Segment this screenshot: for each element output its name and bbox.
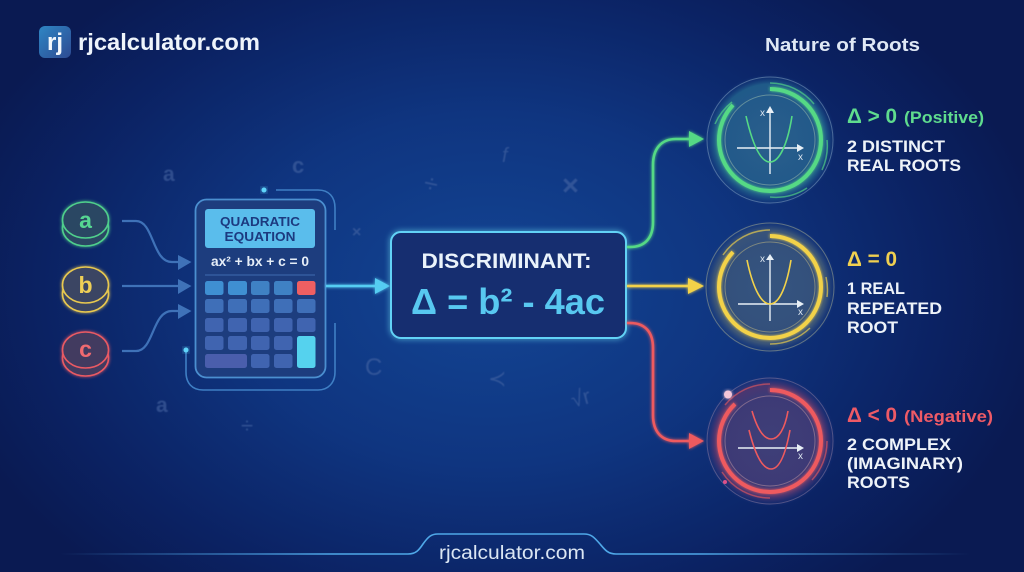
text block: zero: 1 REAL xyxy=(847,279,905,298)
text block: negative: Δ < 0 xyxy=(847,404,897,427)
calculator xyxy=(196,200,326,378)
footer url: rjcalculator.com xyxy=(439,543,585,564)
faded math symbols xyxy=(156,145,593,438)
text block: positive: 2 DISTINCT xyxy=(847,137,946,156)
icon: complex roots graph: x xyxy=(798,451,803,462)
input coin a: a xyxy=(79,207,92,233)
calculator keypad xyxy=(205,275,316,368)
faded math symbols: × xyxy=(352,224,361,241)
text block: positive: REAL ROOTS xyxy=(847,156,961,175)
faded math symbols: √r xyxy=(568,383,593,412)
faded math symbols: ÷ xyxy=(421,169,441,199)
input coin c xyxy=(62,332,108,376)
faded math symbols: ≺ xyxy=(488,366,506,391)
discriminant formula: Δ = b² - 4ac xyxy=(411,281,605,322)
screen title: EQUATION xyxy=(224,230,296,244)
arrow: calculator to discriminant xyxy=(326,278,390,294)
input coin c: c xyxy=(79,336,92,362)
text block: positive: Δ > 0 xyxy=(847,105,897,128)
panel: discriminant xyxy=(391,232,626,338)
faded math symbols: ÷ xyxy=(241,413,253,438)
faded math symbols: a xyxy=(163,163,175,186)
text block: negative: ROOTS xyxy=(847,473,910,492)
icon: positive roots graph: x xyxy=(798,152,803,163)
text block: positive xyxy=(847,105,984,175)
icon: complex roots graph xyxy=(704,375,836,507)
screen title: QUADRATIC xyxy=(220,215,300,229)
arrow: to positive xyxy=(627,131,704,247)
arrow: to zero xyxy=(627,278,704,294)
text block: zero: ROOT xyxy=(847,318,899,337)
input coin a xyxy=(62,202,108,246)
logo letters: rj xyxy=(47,29,63,56)
faded math symbols: c xyxy=(292,153,304,178)
calculator brackets xyxy=(184,188,335,390)
calculator body xyxy=(196,200,326,378)
arrow: to negative xyxy=(627,323,704,449)
text block: zero xyxy=(847,248,942,337)
icon: positive roots graph: x xyxy=(760,108,765,119)
screen title xyxy=(220,215,300,244)
text block: zero: REPEATED xyxy=(847,299,942,318)
text block: positive: (Positive) xyxy=(904,109,984,127)
input coin b: b xyxy=(78,272,93,298)
faded math symbols: a xyxy=(156,394,168,417)
faded math symbols: f xyxy=(502,145,510,167)
icon: zero root graph: x xyxy=(798,307,803,318)
footer xyxy=(60,534,970,564)
icon: zero root graph: x xyxy=(760,254,765,265)
text block: negative: 2 COMPLEX xyxy=(847,435,952,454)
input coin b xyxy=(62,267,108,312)
input arrows xyxy=(122,221,192,351)
heading: nature of roots: Nature of Roots xyxy=(765,35,920,55)
logo xyxy=(39,26,260,58)
discriminant label: DISCRIMINANT: xyxy=(422,250,592,273)
faded math symbols: C xyxy=(365,354,382,381)
equation: ax² + bx + c = 0 xyxy=(211,253,309,269)
icon: positive roots graph xyxy=(704,74,836,206)
text block: negative: (Negative) xyxy=(904,408,993,426)
logo badge xyxy=(39,26,71,58)
logo wordmark: rjcalculator.com xyxy=(78,29,260,55)
faded math symbols: × xyxy=(562,170,579,202)
text block: negative: (IMAGINARY) xyxy=(847,454,963,473)
icon: zero root graph xyxy=(703,220,837,354)
text block: zero: Δ = 0 xyxy=(847,248,897,271)
calculator screen xyxy=(205,209,315,248)
text block: negative xyxy=(847,404,993,492)
